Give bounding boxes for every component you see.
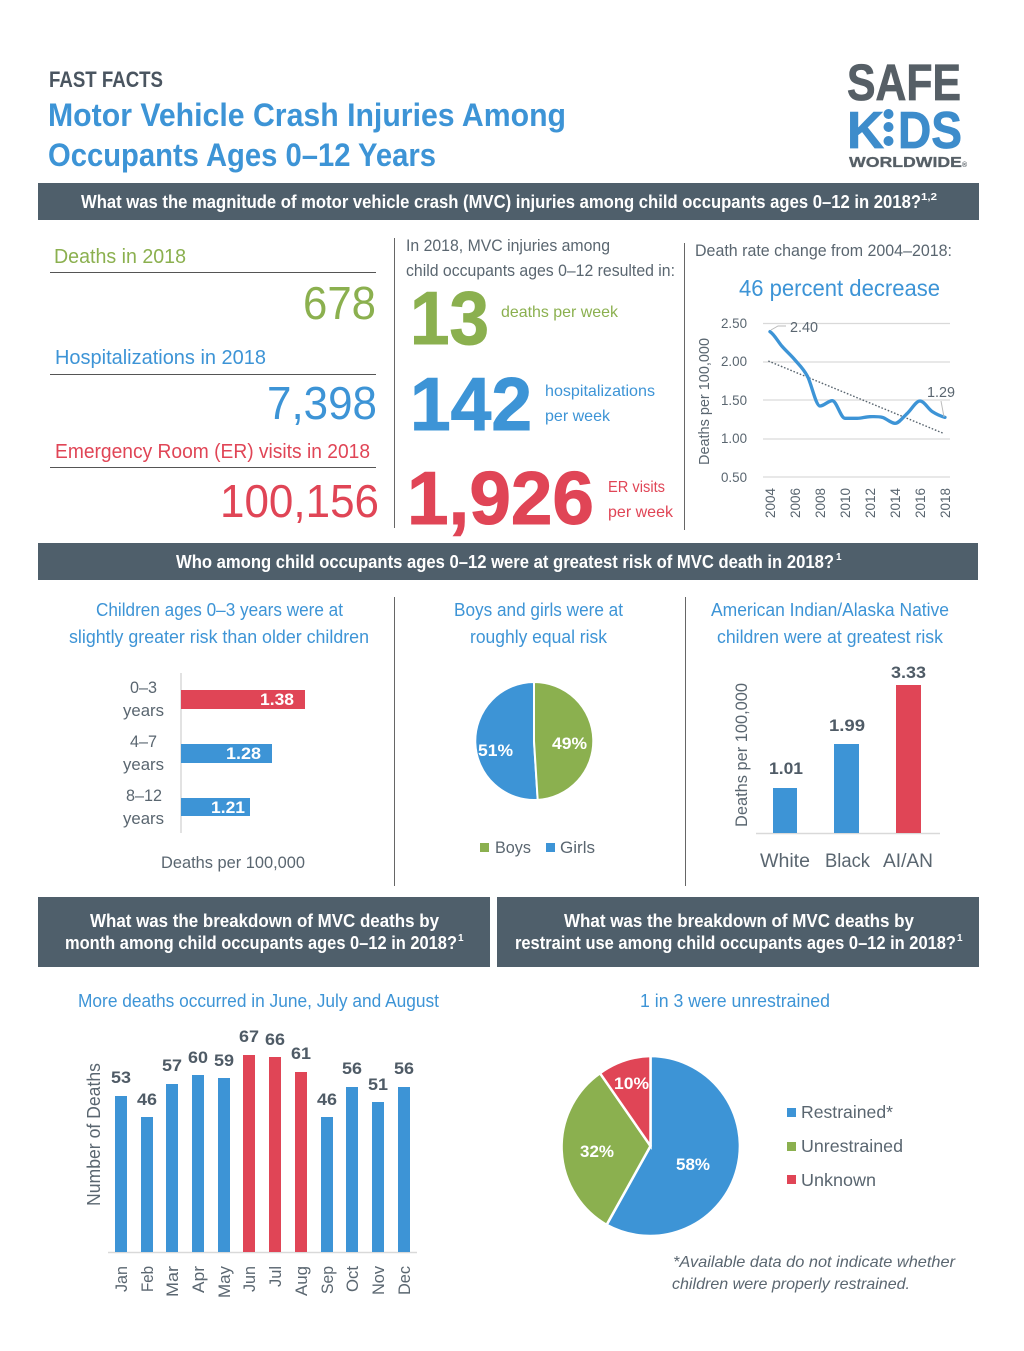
panel: weekly counts: 1,926 <box>407 456 594 540</box>
panel heading: race risk: children were at greatest risk <box>717 627 944 647</box>
panel: weekly counts <box>406 237 675 540</box>
bar chart: deaths by month: 56 <box>394 1059 414 1078</box>
panel: weekly counts: In 2018, MVC injuries among <box>406 237 610 255</box>
panel: death rate change: Death rate change from 2004–2018: <box>695 242 952 260</box>
section header: deaths by month <box>38 897 490 967</box>
title block <box>48 67 566 173</box>
bar chart: deaths by age: years <box>123 810 164 828</box>
line chart: death rate 2004-2018: 1.50 <box>721 392 747 408</box>
panel: weekly counts: per week <box>545 408 611 425</box>
bar chart: deaths by age: 0–3 <box>130 679 157 697</box>
section header: deaths by month: What was the breakdown of MVC deaths by <box>90 911 439 931</box>
bar chart: deaths by month: 53 <box>111 1068 131 1087</box>
logo: Safe Kids Worldwide: WORLDWIDE <box>849 154 962 171</box>
pie legend: restraint use: Unknown <box>801 1170 876 1190</box>
bar chart: deaths by age <box>123 673 305 872</box>
logo: Safe Kids Worldwide: SAFE <box>847 54 961 111</box>
line chart: death rate 2004-2018: 2.40 <box>790 320 818 336</box>
logo: Safe Kids Worldwide <box>847 54 968 171</box>
logo: Safe Kids Worldwide: ® <box>962 161 968 169</box>
panel: weekly counts: 142 <box>410 362 532 446</box>
bar chart: deaths by month <box>84 1027 417 1298</box>
bar chart: deaths by race: 1.99 <box>829 716 865 735</box>
logo: Safe Kids Worldwide: K <box>847 102 884 160</box>
bar chart: deaths by month: 57 <box>162 1056 182 1075</box>
bar chart: deaths by age: Deaths per 100,000 <box>161 854 305 872</box>
pie legend: restraint use: Restrained* <box>801 1102 893 1122</box>
section header: magnitude <box>38 183 979 220</box>
line chart: death rate 2004-2018: 2010 <box>837 488 853 518</box>
title block: Motor Vehicle Crash Injuries Among <box>48 97 566 133</box>
panel: annual totals: Hospitalizations in 2018 <box>55 347 266 369</box>
bar chart: deaths by month: Dec <box>395 1266 414 1295</box>
line chart: death rate 2004-2018: 1.00 <box>721 430 747 446</box>
panel heading: age risk <box>69 600 369 647</box>
line chart: death rate 2004-2018: 2016 <box>912 488 928 518</box>
section header: greatest risk: Who among child occupants ages 0–12 were at greatest risk of MVC death in 2018? <box>176 552 834 572</box>
panel: weekly counts: deaths per week <box>501 304 619 321</box>
section header: magnitude: What was the magnitude of motor vehicle crash (MVC) injuries among child occupants ages 0–12 in 2018? <box>81 192 921 212</box>
line chart: death rate 2004-2018: 2008 <box>812 488 828 518</box>
panel: weekly counts: ER visits <box>608 479 665 496</box>
section header: greatest risk <box>38 543 978 580</box>
bar chart: deaths by month: May <box>215 1266 234 1298</box>
bar chart: deaths by month: Jan <box>112 1266 131 1292</box>
bar chart: deaths by race: Black <box>825 851 870 872</box>
panel: weekly counts: hospitalizations <box>545 383 655 400</box>
panel heading: restraint: 1 in 3 were unrestrained <box>640 991 830 1011</box>
line chart: death rate 2004-2018: 2006 <box>787 488 803 518</box>
panel heading: race risk: American Indian/Alaska Native <box>711 600 949 620</box>
bar chart: deaths by race: Deaths per 100,000 <box>733 683 751 827</box>
bar chart: deaths by month: 56 <box>342 1059 362 1078</box>
pie legend: Girls <box>560 839 595 857</box>
bar chart: deaths by race: 1.01 <box>769 759 803 778</box>
section header: magnitude: 1,2 <box>921 192 937 203</box>
section header: greatest risk: 1 <box>836 552 842 563</box>
pie legend: restraint use <box>787 1102 903 1190</box>
panel heading: age risk: slightly greater risk than older children <box>69 627 369 647</box>
panel: annual totals: Emergency Room (ER) visits in 2018 <box>55 441 370 463</box>
bar chart: deaths by month: 46 <box>137 1090 157 1109</box>
bar chart: deaths by month: Feb <box>138 1266 157 1292</box>
bar chart: deaths by month: Mar <box>163 1266 182 1297</box>
panel heading: sex risk: roughly equal risk <box>470 627 608 647</box>
bar chart: deaths by month: 46 <box>317 1090 337 1109</box>
line chart: death rate 2004-2018: 2.50 <box>721 315 747 331</box>
section header: deaths by restraint use: What was the breakdown of MVC deaths by <box>564 911 914 931</box>
pie chart: restraint use <box>562 1056 740 1236</box>
bar chart: deaths by month: Aug <box>292 1266 311 1296</box>
panel heading: month: More deaths occurred in June, July and August <box>78 991 439 1011</box>
bar chart: deaths by month: 61 <box>291 1044 311 1063</box>
bar chart: deaths by age: years <box>123 756 164 774</box>
panel: weekly counts: per week <box>608 504 674 521</box>
panel heading: race risk <box>711 600 949 647</box>
panel: annual totals: 678 <box>303 277 376 329</box>
panel: weekly counts: child occupants ages 0–12 resulted in: <box>406 262 675 280</box>
pie legend <box>480 839 595 857</box>
footnote: *Available data do not indicate whether <box>673 1254 956 1271</box>
section header: deaths by restraint use <box>497 897 979 967</box>
bar chart: deaths by month: 66 <box>265 1030 285 1049</box>
bar chart: deaths by race: White <box>760 851 810 872</box>
section header: deaths by restraint use: 1 <box>957 933 963 944</box>
pie chart: restraint use: 10% <box>614 1074 649 1093</box>
bar chart: deaths by race <box>733 663 940 872</box>
panel: death rate change <box>695 242 952 301</box>
bar chart: deaths by race: AI/AN <box>883 851 933 872</box>
panel: weekly counts: 13 <box>410 276 489 360</box>
bar chart: deaths by month: 51 <box>368 1075 388 1094</box>
line chart: death rate 2004-2018: 2012 <box>862 488 878 518</box>
logo: Safe Kids Worldwide: DS <box>898 102 962 160</box>
footnote <box>672 1254 956 1293</box>
bar chart: deaths by age: years <box>123 702 164 720</box>
line chart: death rate 2004-2018: 1.29 <box>927 385 955 401</box>
section header: deaths by month: 1 <box>458 933 464 944</box>
bar chart: deaths by month: Nov <box>369 1266 388 1295</box>
line chart: death rate 2004-2018: 2004 <box>762 488 778 518</box>
bar chart: deaths by age: 1.21 <box>211 798 245 817</box>
panel heading: sex risk <box>454 600 623 647</box>
panel: death rate change: 46 percent decrease <box>739 275 940 301</box>
bar chart: deaths by month: Sep <box>318 1266 337 1294</box>
title block: FAST FACTS <box>49 67 163 92</box>
pie legend: Boys <box>495 839 531 857</box>
pie chart: boys and girls: 49% <box>552 734 587 753</box>
panel: annual totals <box>50 246 379 527</box>
line chart: death rate 2004-2018: 0.50 <box>721 469 747 485</box>
panel heading: sex risk: Boys and girls were at <box>454 600 623 620</box>
line chart: death rate 2004-2018: Deaths per 100,000 <box>696 338 713 465</box>
bar chart: deaths by age: 1.28 <box>226 744 261 763</box>
panel heading: age risk: Children ages 0–3 years were at <box>96 600 343 620</box>
bar chart: deaths by month: 67 <box>239 1027 259 1046</box>
panel: annual totals: 7,398 <box>267 377 377 429</box>
line chart: death rate 2004-2018: 2.00 <box>721 353 747 369</box>
line chart: death rate 2004-2018: 2014 <box>887 488 903 518</box>
bar chart: deaths by month: Oct <box>343 1266 362 1292</box>
line chart: death rate 2004-2018: 2018 <box>937 488 953 518</box>
title block: Occupants Ages 0–12 Years <box>48 137 436 173</box>
pie chart: boys and girls: 51% <box>478 741 513 760</box>
section header: deaths by month: month among child occupants ages 0–12 in 2018? <box>65 933 457 953</box>
bar chart: deaths by month: Jul <box>266 1266 285 1287</box>
bar chart: deaths by age: 1.38 <box>260 690 294 709</box>
panel: annual totals: Deaths in 2018 <box>54 246 186 268</box>
footnote: children were properly restrained. <box>672 1276 910 1293</box>
bar chart: deaths by month: 60 <box>188 1048 208 1067</box>
bar chart: deaths by month: Apr <box>189 1266 208 1293</box>
section header: deaths by restraint use: restraint use among child occupants ages 0–12 in 2018? <box>515 933 956 953</box>
line chart: death rate 2004-2018 <box>696 315 955 518</box>
bar chart: deaths by month: Number of Deaths <box>84 1063 104 1206</box>
bar chart: deaths by age: 4–7 <box>130 733 157 751</box>
bar chart: deaths by month: 59 <box>214 1051 234 1070</box>
bar chart: deaths by age: 8–12 <box>126 787 162 805</box>
bar chart: deaths by race: 3.33 <box>891 663 926 682</box>
pie chart: restraint use: 58% <box>676 1155 710 1174</box>
pie chart: restraint use: 32% <box>580 1142 614 1161</box>
pie legend: restraint use: Unrestrained <box>801 1136 903 1156</box>
panel: annual totals: 100,156 <box>220 475 379 527</box>
pie chart: boys and girls <box>475 682 593 800</box>
bar chart: deaths by month: Jun <box>240 1266 259 1292</box>
